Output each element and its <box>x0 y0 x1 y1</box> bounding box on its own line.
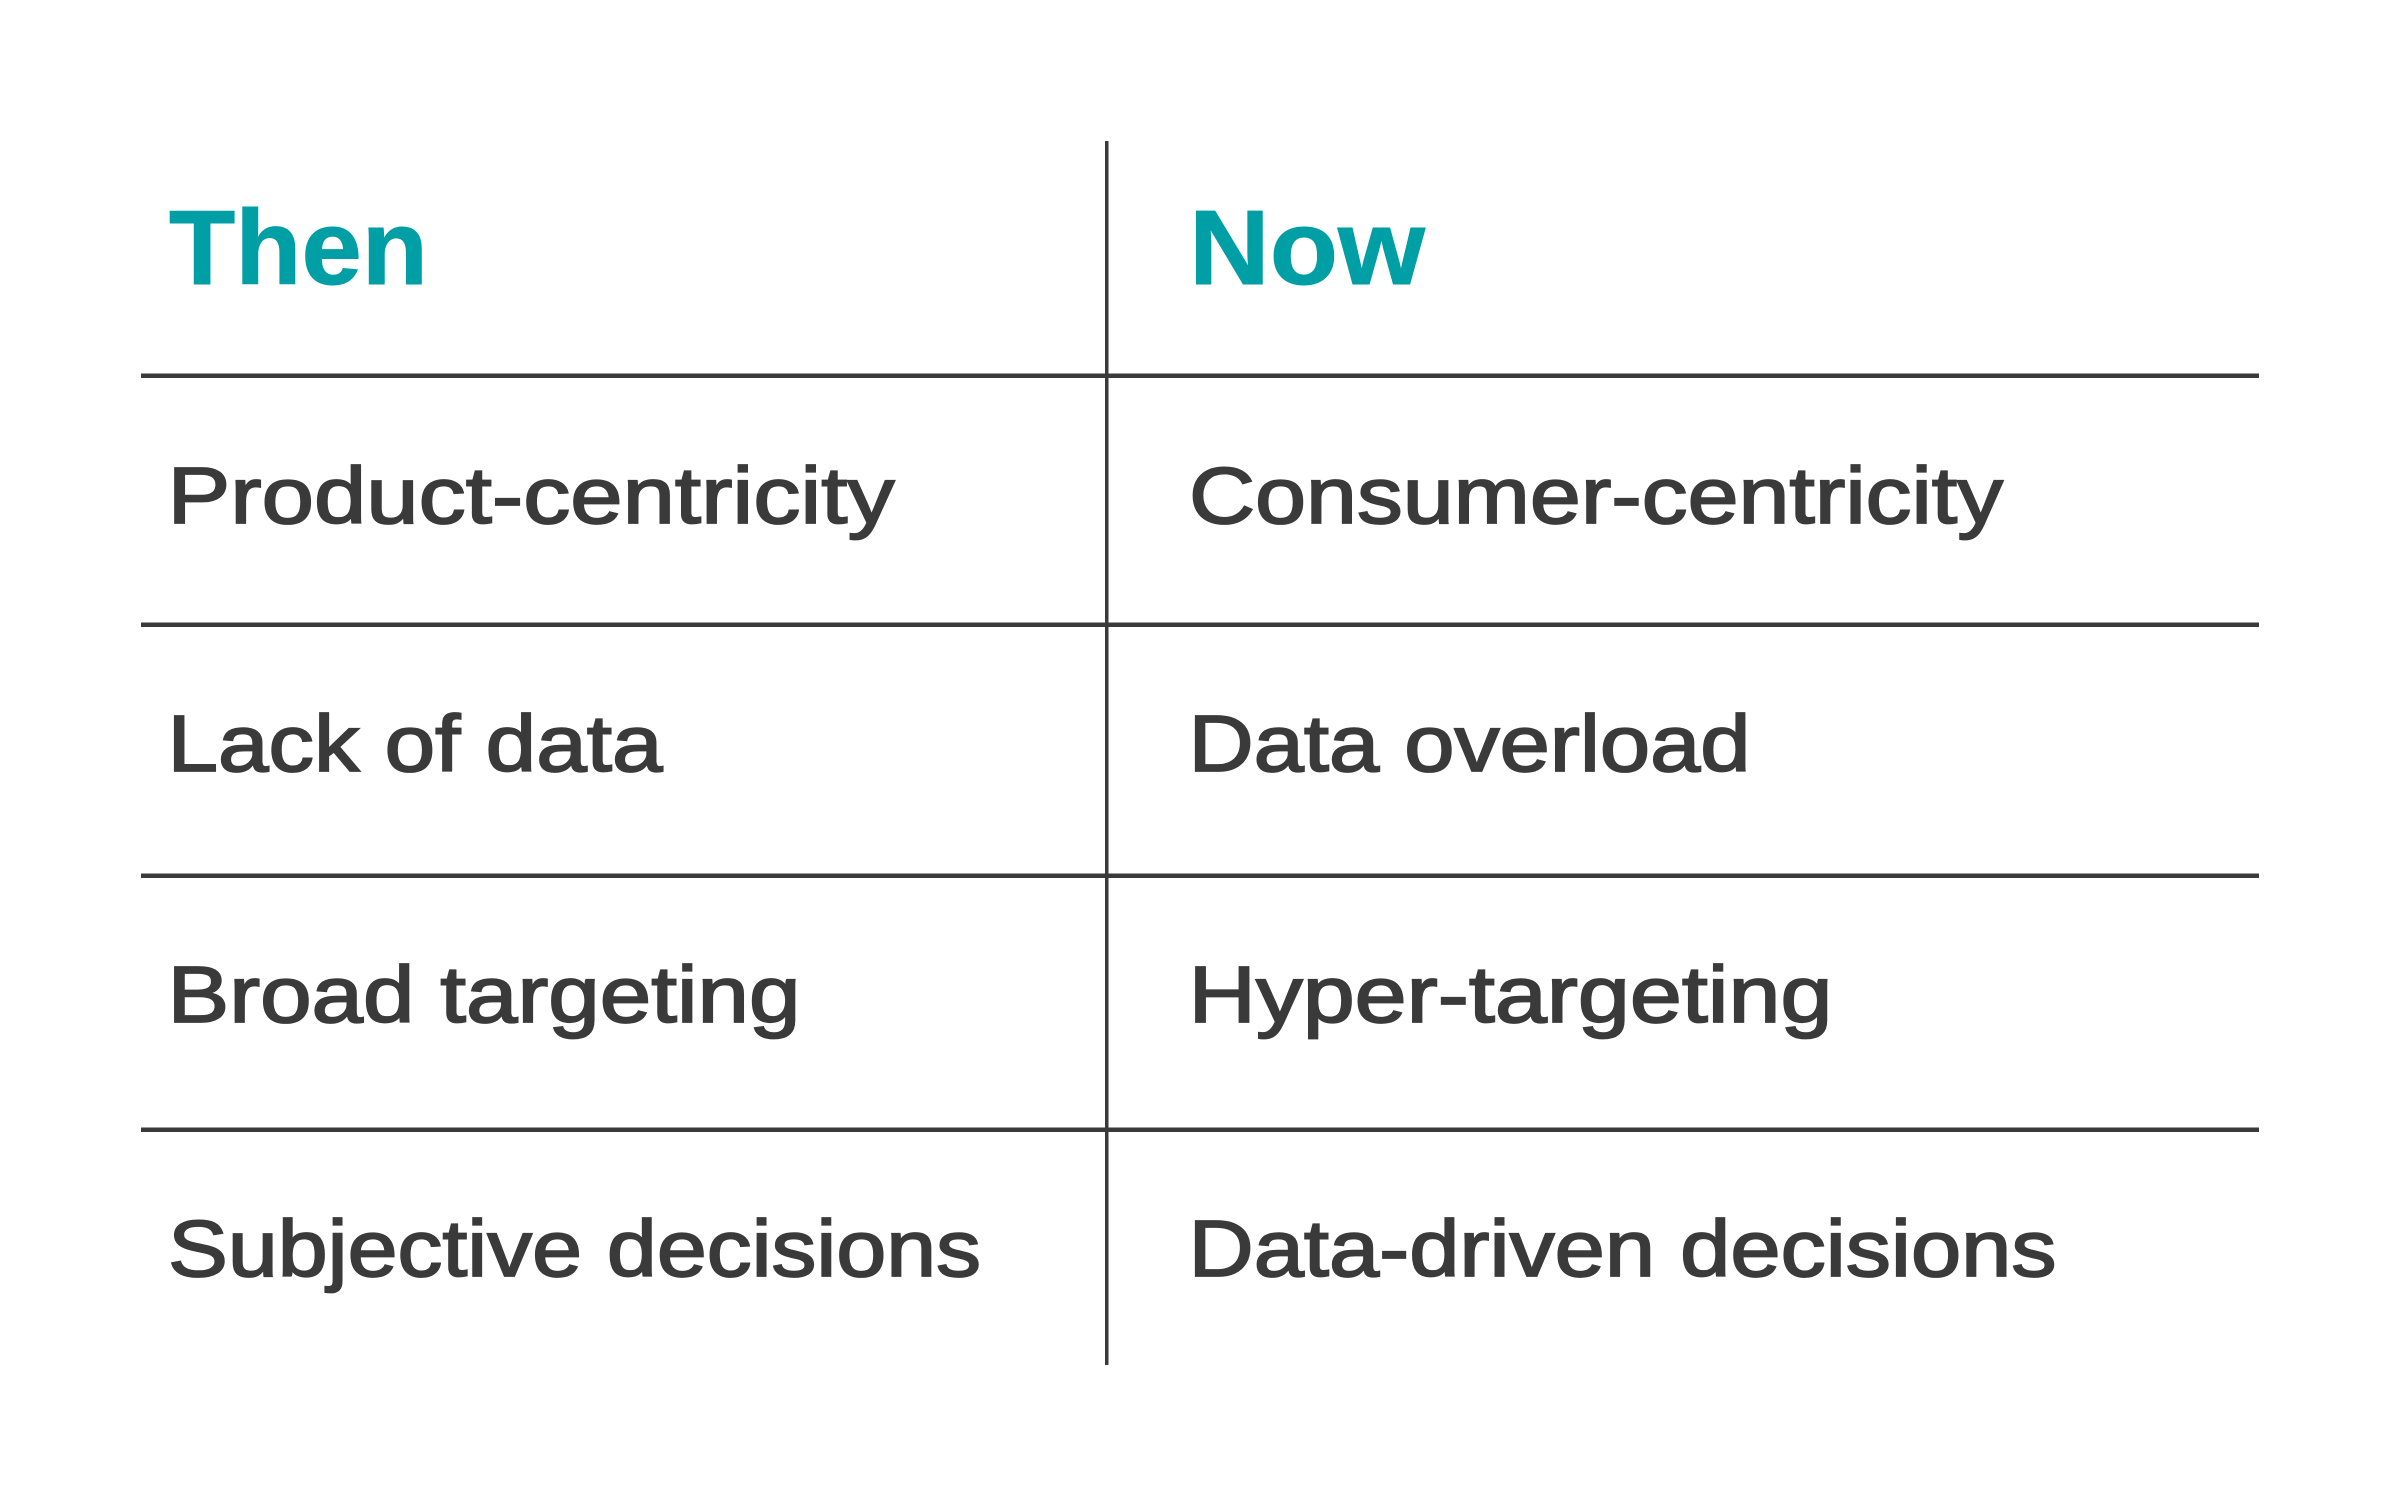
panel: then column <box>168 189 981 1293</box>
text: lack of data: Lack of data <box>168 699 663 788</box>
heading: then: Then <box>169 189 428 307</box>
heading: now: Now <box>1189 189 1426 307</box>
text: subjective decisions: Subjective decisions <box>168 1204 981 1293</box>
text: broad targeting: Broad targeting <box>168 950 801 1039</box>
text: product-centricity: Product-centricity <box>168 451 894 540</box>
panel: now column <box>1188 189 2056 1293</box>
text: hyper-targeting: Hyper-targeting <box>1188 950 1832 1039</box>
text: data overload: Data overload <box>1188 699 1750 788</box>
text: data-driven decisions: Data-driven decisions <box>1188 1204 2056 1293</box>
text: consumer-centricity: Consumer-centricity <box>1189 451 2003 540</box>
